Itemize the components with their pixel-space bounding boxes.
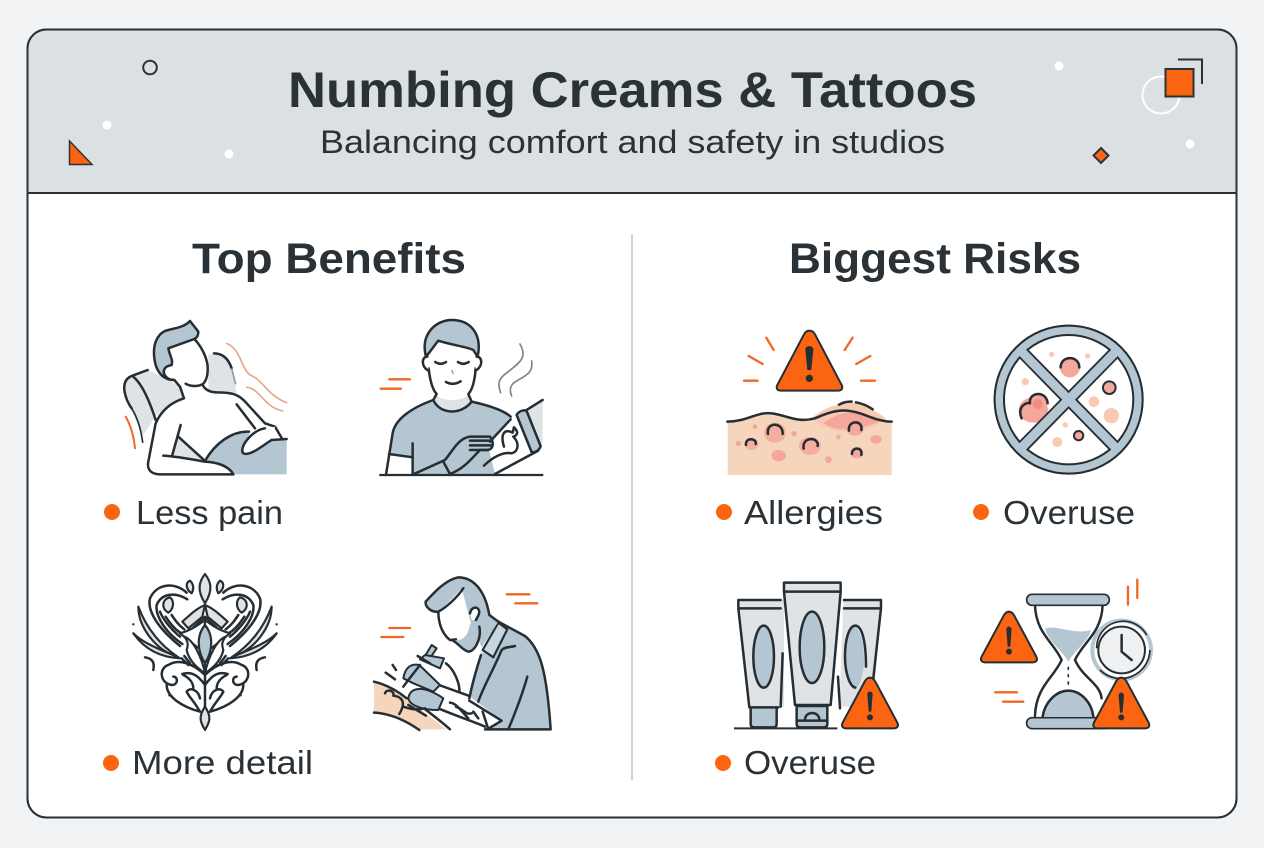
label: overuse tubes: Overuse [744,744,876,781]
icon: skin allergy with warning [727,331,892,475]
icon: cream tubes with warning [734,583,898,728]
panel: top benefits [103,235,551,781]
heading: top benefits: Top Benefits [192,235,466,283]
heading: biggest risks: Biggest Risks [789,235,1081,283]
column divider [631,234,633,780]
panel: biggest risks [715,235,1151,781]
header decorations right [1054,60,1202,163]
icon: prohibited circle with rash [995,326,1143,474]
icon: hourglass with clock and warnings [981,580,1151,729]
label: allergies: Allergies [744,494,883,531]
label: overuse: Overuse [1003,494,1135,531]
icon: ornamental tattoo design [132,574,278,730]
title: Numbing Creams & Tattoos [288,62,977,118]
label: less pain: Less pain [136,494,283,531]
icon: calm person with cream on tattooed arm [379,320,543,475]
header decorations left [70,61,234,165]
icon: relaxed reclining person [124,321,287,474]
icon: artist tattooing skin [374,577,551,730]
subtitle: Balancing comfort and safety in studios [320,124,945,160]
label: more detail: More detail [132,744,313,781]
